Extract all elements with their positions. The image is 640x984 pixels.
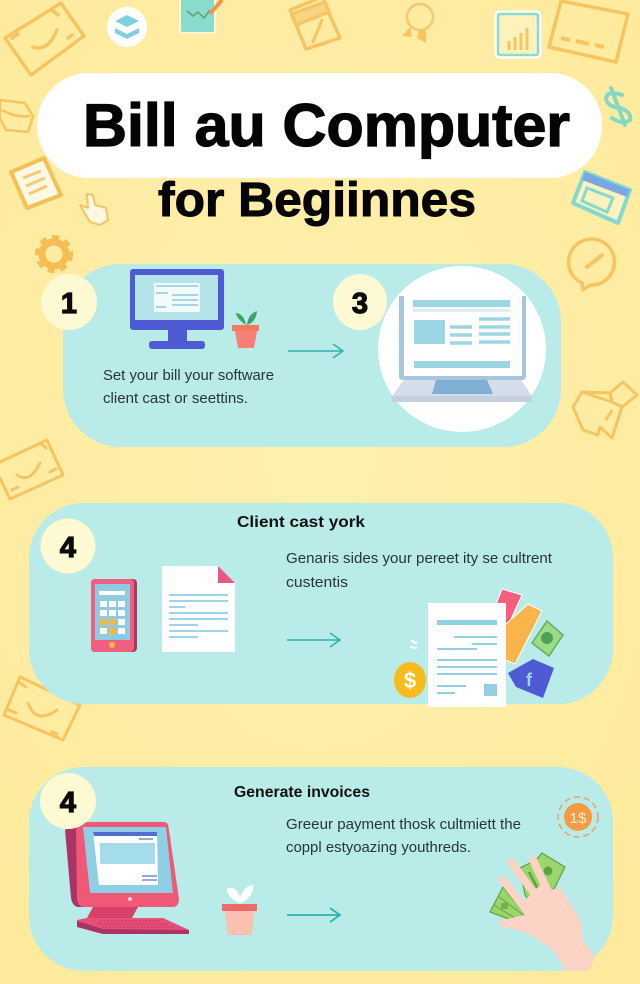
number badge 4: 4 [60,787,76,819]
background icon: bar chart card [496,12,540,57]
icon: document [162,566,235,652]
background icon: medal [402,4,433,43]
illustration: red computer [65,822,189,934]
icon: coin badge: 1$ [570,810,587,827]
number badge 4: 4 [60,532,76,564]
illustration: invoice with phones and money [394,589,563,707]
heading: Generate invoices [234,784,370,801]
illustration: invoice with phones and money: $ [404,668,416,693]
number badge 1: 1 [61,288,77,320]
number badge 1 [41,274,97,330]
background icon: lips left [0,100,33,132]
icon: gift pot [222,885,257,935]
illustration: hand with cash [490,853,595,971]
background icon: banknote left middle [0,440,63,499]
background icon: banknote top left [5,3,84,75]
text: description: coppl estyoazing youthreds. [286,840,471,856]
background icon: gear [37,237,71,271]
text: description [286,817,521,856]
number badge 3: 3 [352,288,368,320]
title pill [37,73,602,178]
text: description: custentis [286,575,348,591]
background icon: stacked layers badge [107,7,147,47]
panel: client cast york [29,503,613,707]
panel: step one and three [41,264,561,447]
text: description [286,551,552,591]
text: description: Greeur payment thosk cultmiett the [286,817,521,833]
number badge 3 [333,274,387,330]
background icon: calendar note [290,0,340,49]
icon: calculator phone [91,579,137,652]
background icon: browser window [573,172,630,223]
text: step description: client cast or seettins. [103,391,248,407]
title line two: for Begiinnes [158,174,476,227]
icon: potted plant [232,311,259,348]
number badge 4 [40,518,96,574]
background icon: dollar sign [606,88,630,125]
background icon: note sheet [11,158,61,208]
title line one: Bill au Computer [83,92,570,159]
arrow [288,344,343,358]
background icon: pointing hand [80,194,108,225]
background icon: speech bubble [568,239,614,290]
illustration: invoice with phones and money: f [526,670,533,690]
illustration: laptop in white circle [378,266,546,432]
arrow [287,633,340,647]
background icon: banknote left lower [4,677,80,740]
text: description: Genaris sides your pereet ity se cultrent [286,551,552,567]
background icon: open box [573,382,637,438]
text: step description: Set your bill your software [103,368,274,384]
heading: Client cast york [237,514,365,531]
text: step description [103,368,274,407]
background icon: growth chart card [180,0,222,33]
number badge 4 [40,773,96,829]
icon: coin badge [558,797,598,837]
icon: blue monitor [130,269,224,349]
panel: generate invoices [29,767,613,971]
background icon: card top right [549,1,628,62]
arrow [287,908,340,922]
